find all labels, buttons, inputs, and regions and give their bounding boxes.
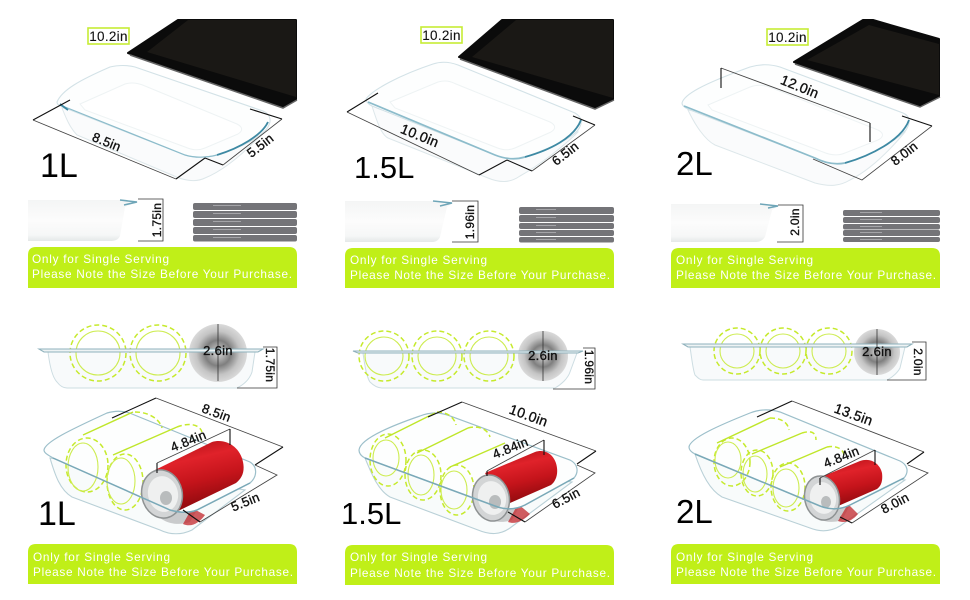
dimension: 4.84in can length: 4.84in xyxy=(490,434,530,462)
note banner: Only for Single Serving xyxy=(33,550,170,564)
note banner: Please Note the Size Before Your Purchase. xyxy=(33,565,293,579)
side view of dish: 2.0in xyxy=(788,208,802,236)
dimension: 13.5in length: 13.5in xyxy=(832,400,875,429)
side view of dish xyxy=(671,204,803,242)
dimension: 12.0in length xyxy=(721,68,870,142)
panel: 1L dish with soda cans xyxy=(28,324,297,584)
note banner xyxy=(671,248,940,288)
capacity label: 1L xyxy=(38,495,76,533)
dimension: 4.84in can length xyxy=(487,434,544,476)
stacked tablets xyxy=(519,207,614,242)
dimension: 5.5in width xyxy=(205,109,282,165)
icon: tablet xyxy=(128,20,297,108)
note banner xyxy=(345,545,614,585)
note banner xyxy=(28,247,297,288)
side view of dish with cans: 2.6in xyxy=(528,348,558,363)
capacity label: 2L xyxy=(676,493,713,530)
dimension: 6.5in width: 6.5in xyxy=(549,484,583,512)
stacked tablets xyxy=(193,203,297,242)
note banner: Please Note the Size Before Your Purchase. xyxy=(32,267,292,281)
capacity label: 1.5L xyxy=(341,496,401,531)
stacked tablets xyxy=(843,210,940,242)
glass dish xyxy=(682,65,909,185)
side view of dish: 1.96in xyxy=(463,205,477,239)
dimension: 8.0in width xyxy=(840,465,928,523)
panel: 2L dish with soda cans xyxy=(671,328,940,584)
perspective dish with cans xyxy=(689,410,907,531)
dimension: 8.0in width: 8.0in xyxy=(878,489,912,517)
dimension: 8.5in length: 8.5in xyxy=(200,401,233,425)
dimension: 12.0in length: 12.0in xyxy=(778,71,821,101)
note banner xyxy=(671,544,940,584)
label: tablet width: 10.2in xyxy=(89,29,128,44)
panel: 1.5L dish with soda cans xyxy=(341,331,614,585)
glass dish xyxy=(366,62,581,182)
label: tablet width: 10.2in xyxy=(422,28,461,43)
capacity label: 1.5L xyxy=(354,150,414,185)
dimension: 10.0in length xyxy=(347,93,507,175)
side view of dish: 1.75in xyxy=(150,203,164,237)
glass dish xyxy=(57,66,270,181)
note banner: Please Note the Size Before Your Purchase. xyxy=(350,268,610,282)
note banner: Only for Single Serving xyxy=(350,550,487,564)
label: tablet width: 10.2in xyxy=(768,30,807,45)
dimension: 10.0in length: 10.0in xyxy=(398,120,441,150)
dimension: 8.5in length xyxy=(112,398,283,465)
side view of dish with cans: 1.96in xyxy=(582,350,596,384)
dimension: 5.5in width xyxy=(183,465,277,522)
note banner xyxy=(345,248,614,288)
dimension: 4.84in can length xyxy=(820,443,875,485)
panel: 1.5L dish beside tablet xyxy=(345,20,614,288)
side view of dish with cans xyxy=(39,324,277,388)
side view of dish with cans xyxy=(353,331,596,389)
capacity label: 1L xyxy=(40,147,78,185)
side view of dish with cans: 2.6in xyxy=(203,343,233,358)
dimension: 4.84in can length xyxy=(157,427,230,473)
panel: 1L dish beside tablet xyxy=(28,20,297,288)
dimension: 8.5in length xyxy=(33,100,205,179)
capacity label: 2L xyxy=(676,145,713,182)
dimension: 8.5in length: 8.5in xyxy=(90,129,123,154)
dimension: 8.0in width xyxy=(813,116,932,180)
dimension: 8.0in width: 8.0in xyxy=(888,138,921,169)
dimension: 6.5in width xyxy=(507,116,595,171)
note banner: Only for Single Serving xyxy=(676,550,813,564)
note banner: Please Note the Size Before Your Purchase. xyxy=(676,565,936,579)
note banner: Please Note the Size Before Your Purchase. xyxy=(676,268,936,282)
side view of dish with cans: 2.0in xyxy=(911,348,925,376)
dimension: 4.84in can length: 4.84in xyxy=(168,427,208,455)
side view of dish with cans: 2.6in xyxy=(862,344,892,359)
note banner: Please Note the Size Before Your Purchase. xyxy=(350,566,610,580)
dimension: 5.5in width: 5.5in xyxy=(244,130,277,161)
icon: tablet xyxy=(459,20,614,109)
note banner: Only for Single Serving xyxy=(350,253,487,267)
panel: 2L dish beside tablet xyxy=(671,20,940,288)
dimension: 13.5in length xyxy=(757,400,924,464)
side view of dish xyxy=(28,199,164,241)
dimension: 10.0in length xyxy=(428,401,596,464)
icon: tablet xyxy=(794,20,940,107)
dimension: 6.5in width xyxy=(508,465,595,522)
side view of dish xyxy=(345,201,478,242)
note banner: Only for Single Serving xyxy=(676,253,813,267)
side view of dish with cans: 1.75in xyxy=(263,348,277,382)
dimension: 4.84in can length: 4.84in xyxy=(821,443,861,471)
perspective dish with cans xyxy=(359,412,577,534)
dimension: 10.0in length: 10.0in xyxy=(507,401,550,430)
dimension: 5.5in width: 5.5in xyxy=(229,489,262,514)
note banner xyxy=(28,544,297,584)
perspective dish with cans xyxy=(44,411,256,534)
side view of dish with cans xyxy=(683,328,926,380)
note banner: Only for Single Serving xyxy=(32,252,169,266)
dimension: 6.5in width: 6.5in xyxy=(549,138,582,169)
